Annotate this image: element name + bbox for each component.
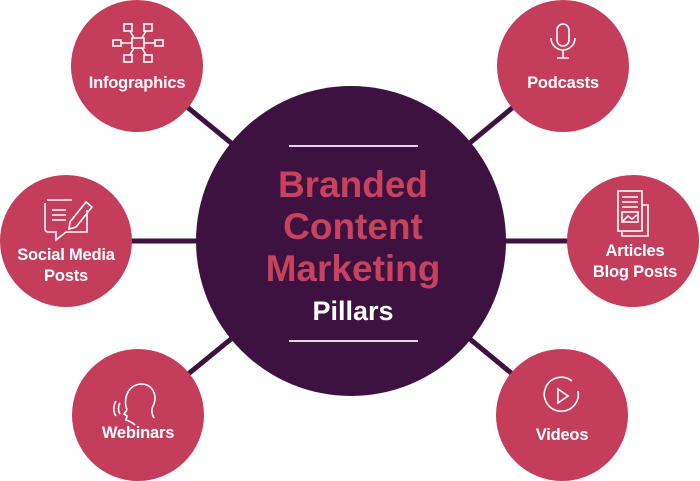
node: Podcasts: Podcasts bbox=[527, 74, 599, 92]
node: Infographics bbox=[71, 0, 203, 132]
center circle: Content bbox=[283, 206, 423, 247]
node: Articles Blog Posts bbox=[567, 175, 699, 307]
node: Webinars: Webinars bbox=[102, 424, 174, 442]
node: Podcasts bbox=[497, 0, 629, 132]
center circle: Pillars bbox=[312, 296, 394, 326]
node: Webinars bbox=[72, 349, 204, 481]
title: Branded bbox=[278, 164, 428, 205]
node: Articles Blog Posts: Articles bbox=[606, 242, 664, 260]
node: Infographics: Infographics bbox=[89, 74, 185, 92]
icon: play circle bbox=[544, 377, 578, 411]
icon: microphone bbox=[551, 24, 575, 58]
icon: hierarchy bbox=[113, 24, 163, 62]
node: Social Media Posts: Social Media bbox=[17, 246, 116, 264]
icon: chat with pencil bbox=[45, 200, 92, 240]
center circle: Marketing bbox=[266, 248, 440, 289]
icon: article bbox=[618, 191, 648, 236]
icon: speaking head bbox=[114, 384, 155, 425]
node: Videos bbox=[496, 349, 628, 481]
node: Articles Blog Posts: Blog Posts bbox=[593, 263, 677, 281]
node: Social Media Posts: Posts bbox=[44, 267, 88, 285]
connectors bbox=[66, 66, 633, 415]
node: Videos: Videos bbox=[536, 426, 588, 444]
node: Social Media Posts bbox=[0, 175, 132, 307]
center circle bbox=[196, 86, 506, 396]
